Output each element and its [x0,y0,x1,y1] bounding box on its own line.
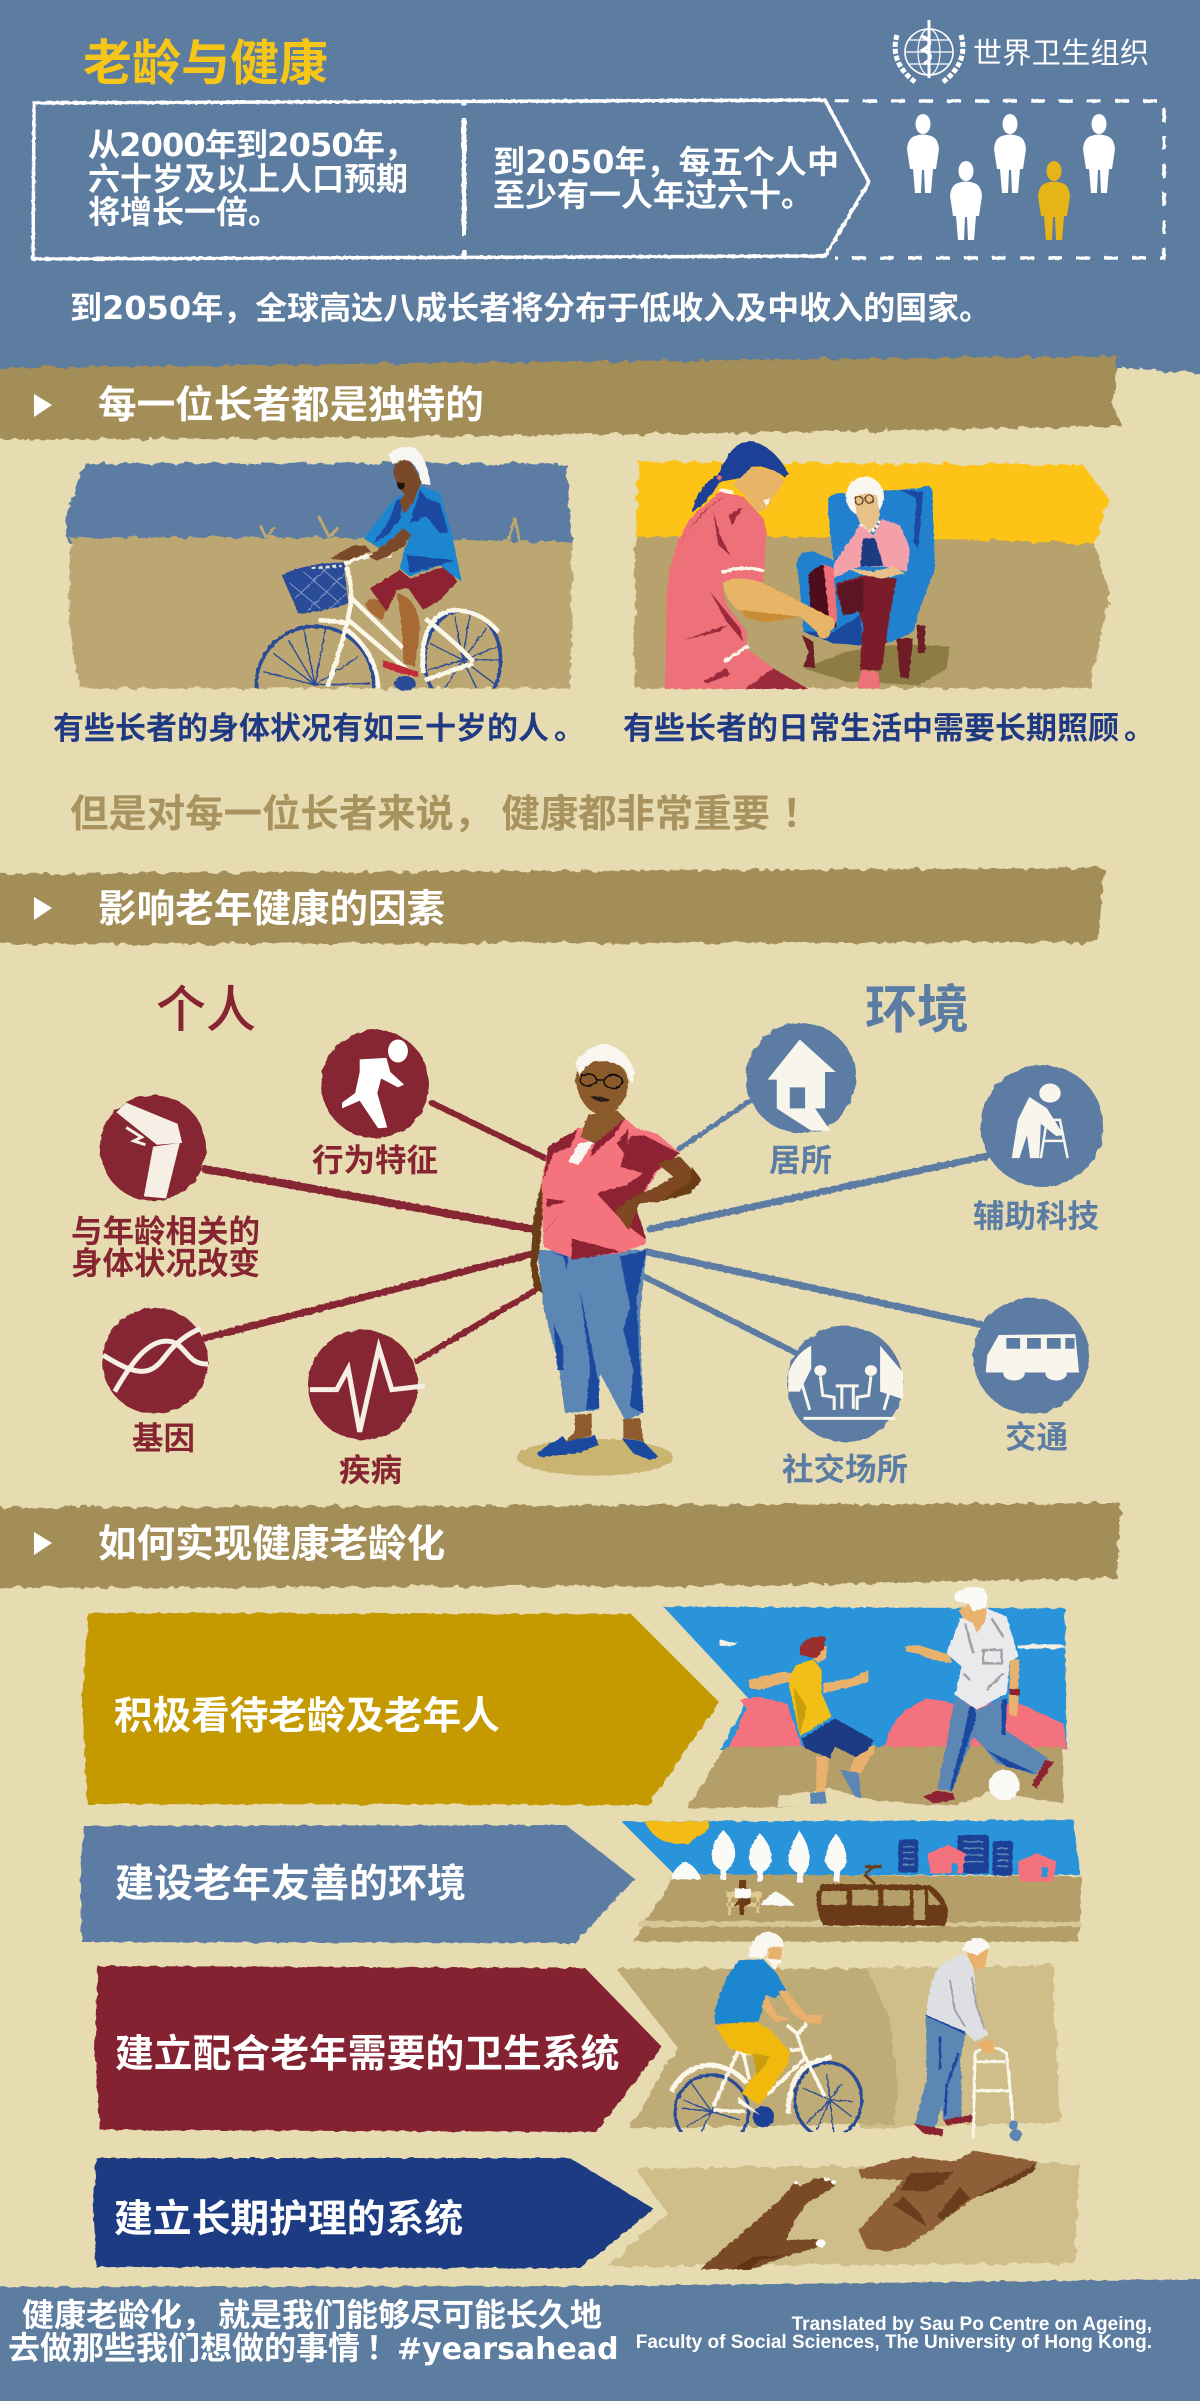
heading: 每一位长者都是独特的 [98,374,484,430]
factor: disease [308,1330,425,1491]
trees [670,1830,847,1906]
arrow marker [34,1532,52,1555]
right arm [615,1157,702,1230]
shoes [537,1435,658,1460]
illustration: carer and elder [635,441,1110,689]
people icons [907,114,1115,240]
ageing doubling text [88,120,416,233]
label: 行为特征 [312,1135,438,1181]
label: 疾病 [339,1445,402,1491]
rider shirt [715,1959,786,2024]
footer panel [0,2279,1200,2401]
yellow arrow [82,1613,719,1805]
left arm [531,1183,545,1293]
label: 积极看待老龄及老年人 [114,1685,500,1741]
circle [321,1030,429,1138]
factor: age related changes [71,1095,260,1284]
closing message: 健康老龄化，就是我们能够尽可能长久地 [22,2290,602,2336]
circle [308,1330,418,1440]
heading: environment: 环境 [865,968,969,1043]
buildings [898,1835,1013,1876]
section banner: every elder is unique [0,356,1122,440]
ankles [565,1413,644,1443]
chair legs [802,625,925,679]
shirt [542,1118,680,1258]
label: 交通 [1005,1412,1068,1458]
factor: behaviour [312,1030,438,1181]
illustration: cyclist and walker [616,1932,1060,2148]
credits: Translated by Sau Po Centre on Ageing, [792,2314,1152,2335]
credits: Faculty of Social Sciences, The University of Hong Kong. [636,2332,1152,2353]
action: health systems [95,1966,662,2132]
elder legs [837,575,897,670]
heading: individual: 个人 [156,970,256,1042]
header blue background [0,0,1200,380]
factor: genes [102,1308,208,1459]
caption: fit elder: 有些长者的身体状况有如三十岁的人。 [53,703,585,748]
illustration: city [622,1820,1082,1942]
ageing doubling text: 从2000年到2050年， [88,120,416,166]
header panel [0,0,1200,380]
action: age friendly environments [80,1825,635,1943]
elder [846,477,884,517]
factor: social spaces [782,1326,908,1490]
circle [973,1298,1089,1414]
factor: housing [746,1023,856,1181]
WHO logo [895,20,963,82]
circle [981,1065,1103,1187]
credits [636,2314,1152,2353]
frame [672,2023,832,2113]
action: long term care [93,2158,654,2268]
label: 建设老年友善的环境 [115,1853,466,1909]
carer head and hair [733,467,784,512]
sky [622,1820,1080,1875]
walker user shirt [927,1953,988,2042]
blue arrow [80,1825,635,1943]
social table icon [788,1346,903,1418]
rider trousers [715,2020,790,2105]
closing message: #yearsahead [397,2332,619,2367]
chair [796,486,935,645]
label: 身体状况改变 [71,1238,260,1284]
circle [100,1095,206,1201]
wheels [673,2072,751,2132]
circle [102,1308,208,1414]
tram [865,1867,882,1884]
label: 建立配合老年需要的卫生系统 [115,2023,619,2079]
ball [989,1770,1020,1800]
statement: health matters: 但是对每一位长者来说，健康都非常重要 ！ [70,783,820,839]
central elder figure [517,1044,702,1476]
old man [905,1645,952,1663]
shoe [383,660,418,677]
walker user shoes [913,2115,973,2136]
sun [645,1822,710,1844]
upper hand [858,2151,1038,2252]
arrow marker [34,394,52,417]
knee icon [116,1103,182,1198]
one in five text [493,137,839,216]
caption: elder needing care: 有些长者的日常生活中需要长期照顾。 [623,703,1155,748]
illustration: hands [608,2151,1079,2269]
heading: 如何实现健康老龄化 [98,1513,445,1569]
lower hand [700,2178,837,2269]
factor: assistive technology [973,1065,1103,1237]
shadow [517,1439,673,1476]
bike frame [318,555,498,688]
ageing doubling text: 六十岁及以上人口预期 [88,154,408,200]
title: 老龄与健康 [83,24,328,95]
hair [575,1044,635,1083]
grass [260,516,519,540]
small bushes [670,1862,795,1906]
pulse icon [310,1348,425,1432]
arrow marker [34,897,52,920]
red arrow [95,1966,662,2132]
neck [580,1110,625,1143]
one in five text: 到2050年，每五个人中 [493,137,839,183]
label [71,1206,260,1284]
income statement: 到2050年，全球高达八成长者将分布于低收入及中收入的国家。 [70,283,991,329]
bench and reader [727,1892,762,1915]
carer body [665,492,808,689]
legs [365,599,387,620]
elder hands [847,567,905,578]
one in five text: 至少有一人年过六十。 [493,170,813,216]
houses [927,1845,1057,1882]
ground [633,1874,1082,1942]
rider head [768,1947,782,1963]
walker figure icon [1012,1084,1068,1158]
label: 建立长期护理的系统 [114,2188,463,2244]
basket [282,563,348,613]
heading: 影响老年健康的因素 [98,878,445,934]
circle [746,1023,856,1133]
DNA icon [103,1328,208,1392]
WHO name: 世界卫生组织 [973,30,1149,72]
head [575,1060,628,1115]
carer arm [723,578,835,638]
factor connector lines [205,1101,987,1361]
runner icon [342,1040,408,1128]
shirt [363,487,462,582]
chalk arrow box [33,100,1164,259]
walker user head [967,1948,988,1972]
shorts [370,566,457,612]
jeans [537,1250,647,1420]
label: 基因 [132,1413,195,1459]
label: 社交场所 [782,1444,908,1490]
illustration: football [663,1587,1067,1810]
label: 辅助科技 [973,1191,1099,1237]
glasses [580,1074,623,1088]
bushes [727,1697,1067,1750]
navy arrow [93,2158,654,2268]
ground [687,1747,1063,1808]
bus icon [986,1334,1079,1380]
rider arms [762,1990,823,2024]
closing message: 去做那些我们想做的事情！ [8,2323,398,2369]
house icon [768,1040,836,1131]
label: 与年龄相关的 [71,1206,260,1252]
wheels [254,624,376,689]
walker user trousers [915,2015,966,2128]
ageing doubling text: 将增长一倍。 [88,187,280,233]
closing message [8,2290,619,2369]
circle [787,1326,903,1442]
factor: transport [973,1298,1089,1458]
walking frame [973,2048,1013,2138]
section banner: factors [0,868,1104,944]
section banner: healthy ageing [0,1503,1120,1588]
sky [663,1607,1067,1750]
boy [813,1647,827,1663]
floor shadow [803,645,950,685]
arms [330,545,371,561]
label: 居所 [769,1135,832,1181]
action: positive attitudes [82,1613,719,1805]
head and hair [393,459,422,514]
illustration: cyclist [65,446,574,692]
